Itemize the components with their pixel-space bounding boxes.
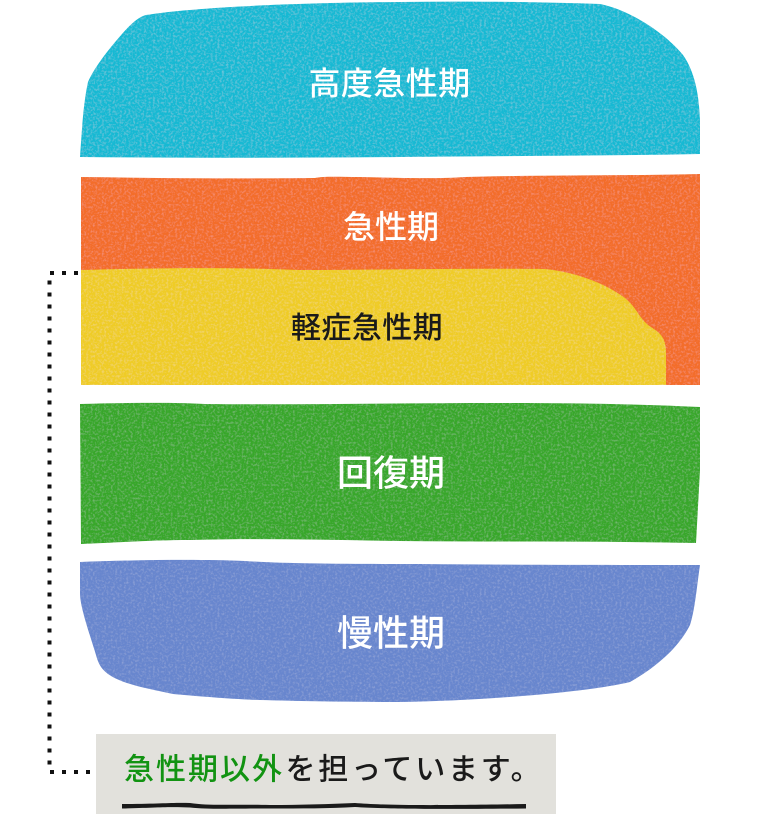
dotted connector	[50, 273, 90, 772]
label: chronic: 慢性期	[337, 612, 445, 654]
label: recovery: 回復期	[337, 452, 445, 494]
brush underline	[122, 803, 526, 809]
panel: acute stage	[81, 174, 700, 385]
panel: chronic stage	[80, 560, 700, 702]
callout: outside acute care	[96, 734, 556, 814]
label: acute: 急性期	[343, 209, 439, 245]
panel: sub-acute stage	[81, 268, 666, 385]
panel: recovery stage	[80, 403, 700, 544]
label: high acuity: 高度急性期	[308, 66, 471, 102]
callout text: 急性期以外を担っています。	[124, 754, 543, 786]
panel: high acuity stage	[80, 2, 700, 158]
label: sub-acute: 軽症急性期	[291, 312, 443, 345]
